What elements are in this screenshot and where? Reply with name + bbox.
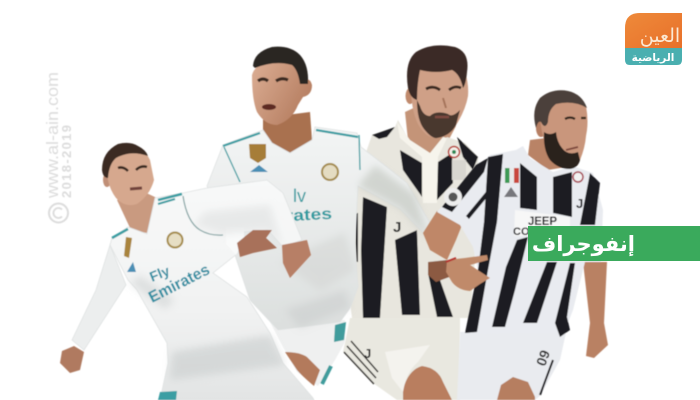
ear <box>103 173 111 187</box>
shorts <box>457 328 567 400</box>
watermark: site and copyright <box>44 72 74 222</box>
logo wordmark: العين <box>640 25 680 47</box>
leg <box>285 352 320 386</box>
shirt and sleeve <box>207 127 430 330</box>
logo teal panel <box>625 48 682 65</box>
short trim <box>158 391 177 400</box>
ear <box>536 119 546 137</box>
hand <box>446 255 490 291</box>
neck <box>263 112 312 153</box>
face <box>106 148 154 205</box>
eyes and mouth <box>426 87 461 90</box>
player: Pjanic, back centre <box>343 45 480 400</box>
hair <box>407 45 468 100</box>
hair <box>253 47 308 84</box>
green banner <box>528 226 700 261</box>
badges <box>444 188 462 206</box>
ear <box>406 88 414 104</box>
pointing hand <box>237 230 277 257</box>
black stripes <box>442 154 600 337</box>
logo subtitle: الرياضية <box>632 52 674 64</box>
leg <box>403 366 452 400</box>
sleeve shadow <box>358 165 428 238</box>
crests <box>124 237 132 258</box>
player: Ronaldo, back left <box>207 47 430 386</box>
teal trim <box>112 194 223 238</box>
beard <box>544 132 580 169</box>
fist <box>282 240 311 278</box>
shirt shadows <box>170 335 285 380</box>
left arm <box>423 211 462 260</box>
eyes <box>565 118 586 119</box>
left arm and fist <box>72 245 126 350</box>
teal trim <box>223 130 360 182</box>
shirt <box>437 146 603 334</box>
player: Higuain, front right <box>423 90 608 400</box>
sponsor fragment: J <box>393 219 401 236</box>
leg <box>497 377 535 400</box>
hand under <box>428 260 452 282</box>
shorts <box>343 316 460 400</box>
player: Higuain, front right: CO <box>513 226 530 238</box>
player: Vazquez, front left: Emirates <box>146 261 213 307</box>
black stripes <box>349 127 478 318</box>
player: Pjanic, back centre: J <box>364 346 371 361</box>
right arm <box>583 262 608 358</box>
shirt body <box>110 180 314 400</box>
watermark: site and copyright: www.al-ain.com <box>44 72 62 199</box>
sponsor: JEEP: JEEP <box>528 216 557 228</box>
cuff <box>226 227 244 255</box>
watermark: site and copyright: 2018-2019 <box>59 125 74 198</box>
crests <box>249 144 266 163</box>
player: Ronaldo, back left: Emirates <box>250 206 333 227</box>
face <box>252 62 312 125</box>
logo orange panel <box>625 13 682 48</box>
neck <box>405 105 456 158</box>
hair <box>534 90 587 128</box>
eyes and mouth <box>118 166 147 171</box>
shirt <box>344 120 480 318</box>
player: Vazquez, front left <box>60 143 314 400</box>
collar placket <box>397 122 447 203</box>
badges <box>448 146 460 158</box>
face <box>411 66 468 138</box>
player: Higuain, front right: J <box>576 196 583 211</box>
shorts <box>270 320 345 386</box>
banner title: إنفوجراف <box>532 232 635 256</box>
neck <box>117 190 157 233</box>
beard <box>417 100 460 138</box>
neck <box>528 135 578 170</box>
face <box>540 98 588 167</box>
player: Higuain, front right: 09 <box>533 348 553 368</box>
hair <box>102 143 148 178</box>
sponsor: Fly Emirates: Fly <box>147 262 172 285</box>
logo: Al-Ain Sports <box>625 13 682 65</box>
eyes and mouth <box>258 79 288 81</box>
sponsor patch <box>514 210 570 236</box>
sponsor: Fly Emirates: lv <box>293 186 306 206</box>
